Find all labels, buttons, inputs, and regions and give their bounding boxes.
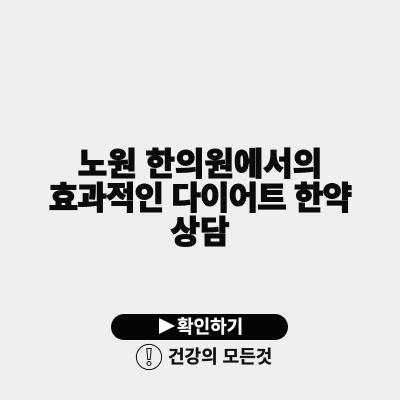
button label: 확인하기 xyxy=(177,317,243,337)
title: 노원 한의원에서의 xyxy=(78,146,322,182)
title: 상담 xyxy=(171,214,229,250)
subtitle: 건강의 모든것 xyxy=(168,347,272,367)
title xyxy=(49,146,352,250)
icon: exclamation circle xyxy=(136,344,162,370)
button: confirm xyxy=(111,314,288,340)
title: 효과적인 다이어트 한약 xyxy=(49,180,351,216)
